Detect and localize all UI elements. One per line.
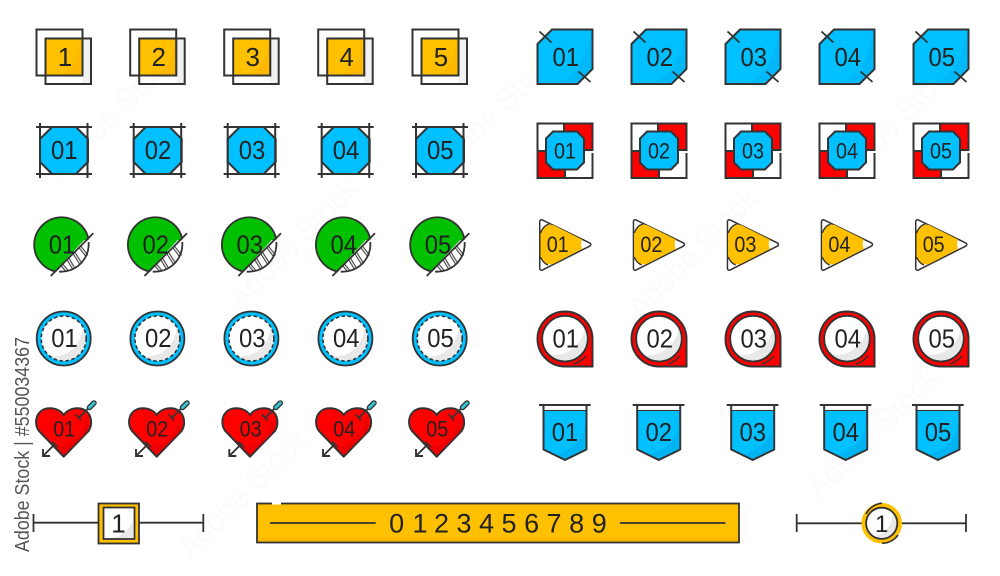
- icon: cut square 03: 03: [740, 42, 767, 72]
- numbers bar: digits 0-9: [257, 504, 739, 542]
- icon: ring 02: 02: [145, 323, 171, 353]
- icon: pin 05: [914, 312, 968, 366]
- numbers bar: digits 0-9: 3: [456, 508, 472, 538]
- icon: square 2: [130, 30, 185, 84]
- numbers bar: digits 0-9: 9: [592, 508, 607, 538]
- numbers bar: digits 0-9: 8: [569, 508, 584, 538]
- icon: octagon 04: 04: [333, 135, 359, 165]
- icon: cut square 05: 05: [928, 42, 955, 72]
- icon: pin 04: [820, 312, 874, 366]
- icon: pin 03: [726, 312, 780, 366]
- icon: quadrant 05: [914, 124, 968, 178]
- icon: cut square 02: 02: [646, 42, 673, 72]
- slider: round handle: 1: [875, 511, 888, 538]
- icon: octagon 04: [318, 123, 374, 178]
- icon: quadrant 01: [538, 124, 592, 178]
- icon: octagon 03: [224, 123, 280, 178]
- icon: cut square 03: [726, 30, 780, 84]
- icon: ring 05: [413, 312, 467, 366]
- icon: green circle 03: 03: [236, 230, 263, 260]
- icon: square 2: 2: [151, 42, 166, 72]
- icon: triangle 04: 04: [828, 232, 850, 257]
- icon: octagon 05: 05: [427, 135, 454, 165]
- icon: heart 04: 04: [333, 417, 355, 442]
- icon: banner 01: 01: [552, 417, 578, 447]
- icon: square 4: [318, 30, 373, 84]
- icon: ring 01: 01: [51, 323, 78, 353]
- icon: ring 03: 03: [239, 323, 265, 353]
- row: blue banners: [539, 405, 964, 460]
- icon: square 3: 3: [245, 42, 260, 72]
- icon: heart 04: [316, 402, 374, 457]
- row: blue ring dashed circles: [37, 312, 467, 366]
- numbers bar: digits 0-9: 6: [524, 508, 539, 538]
- icon: triangle 01: [540, 222, 589, 268]
- icon: pin 05: 05: [928, 324, 955, 354]
- icon: quadrant 04: [820, 124, 874, 178]
- icon: green circle 04: 04: [330, 230, 357, 260]
- icon: banner 05: [912, 405, 964, 460]
- slider: square handle: 1: [111, 508, 126, 538]
- icon: cut square 01: [538, 30, 592, 84]
- row: blue cut-corner squares: [538, 30, 968, 84]
- icon: triangle 02: [634, 222, 683, 268]
- icon: green circle 04: [316, 217, 375, 276]
- icon: octagon 01: [36, 123, 92, 178]
- icon: pin 01: 01: [552, 324, 579, 354]
- icon: banner 02: [633, 405, 684, 460]
- icon: square 1: [36, 30, 91, 84]
- icon: ring 03: [224, 312, 278, 366]
- icon: octagon 02: 02: [145, 135, 171, 165]
- icon: heart 03: 03: [240, 417, 262, 442]
- row: green cut circles: [34, 217, 469, 276]
- icon: quadrant 01: 01: [554, 138, 576, 163]
- icon: triangle 05: [916, 222, 965, 268]
- row: overlapping yellow squares 1-5: [36, 30, 467, 84]
- numbers bar: digits 0-9: 1: [412, 508, 428, 538]
- icon: cut square 05: [914, 30, 968, 84]
- icon: triangle 01: 01: [547, 232, 569, 257]
- icon: quadrant 02: 02: [648, 138, 670, 163]
- icon: square 5: [412, 30, 467, 84]
- icon: banner 04: [820, 405, 871, 460]
- icon: pin 02: [632, 312, 686, 366]
- icon: green circle 02: 02: [142, 230, 169, 260]
- icon: quadrant 04: 04: [836, 138, 858, 163]
- icon: green circle 01: [34, 217, 93, 276]
- icon: pin 03: 03: [740, 324, 767, 354]
- icon: ring 02: [130, 312, 184, 366]
- icon: pin 04: 04: [834, 324, 861, 354]
- numbers bar: digits 0-9: 7: [546, 508, 562, 538]
- icon: triangle 03: [728, 222, 777, 268]
- icon: heart 05: 05: [426, 417, 448, 442]
- icon: green circle 01: 01: [49, 230, 75, 260]
- icon: heart 01: [36, 402, 94, 457]
- row: red hearts with arrows: [36, 402, 467, 457]
- icon: triangle 02: 02: [640, 232, 662, 257]
- icon: cut square 04: [820, 30, 874, 84]
- icon: square 5: 5: [434, 42, 448, 72]
- credit: Adobe Stock vertical text: Adobe Stock | #550034367: [12, 337, 34, 552]
- slider: square handle: [34, 504, 203, 544]
- icon: triangle 05: 05: [923, 232, 945, 257]
- icon: heart 02: [129, 402, 187, 457]
- icon: ring 04: [318, 312, 372, 366]
- row: red pin circles: [538, 312, 968, 366]
- slider: round handle: [797, 503, 966, 543]
- icon: banner 03: 03: [739, 417, 766, 447]
- icon: green circle 05: [410, 217, 469, 276]
- icon: cut square 01: 01: [552, 42, 579, 72]
- row: blue octagons with guide lines: [36, 123, 468, 178]
- icon: square 1: 1: [58, 42, 72, 72]
- row: yellow triangles: [540, 222, 965, 268]
- icon: banner 04: 04: [832, 417, 859, 447]
- icon: quadrant 03: 03: [742, 138, 764, 163]
- icon: square 4: 4: [339, 42, 354, 72]
- icon: octagon 02: [130, 123, 186, 178]
- row: red quadrants with blue octagon: [538, 124, 968, 178]
- icon: banner 03: [727, 405, 778, 460]
- icon: pin 01: [538, 312, 592, 366]
- icon: ring 01: [37, 312, 91, 366]
- icon: banner 02: 02: [645, 417, 672, 447]
- icon: quadrant 05: 05: [930, 138, 952, 163]
- icon: heart 01: 01: [53, 417, 75, 442]
- icon: heart 05: [409, 402, 467, 457]
- icon: quadrant 02: [632, 124, 686, 178]
- icon: green circle 02: [128, 217, 187, 276]
- icon: banner 05: 05: [925, 417, 951, 447]
- icon: pin 02: 02: [646, 324, 673, 354]
- icon: cut square 02: [632, 30, 686, 84]
- icon: heart 03: [222, 402, 280, 457]
- icon: banner 01: [539, 405, 591, 460]
- icon: quadrant 03: [726, 124, 780, 178]
- icon: octagon 05: [412, 123, 468, 178]
- numbers bar: digits 0-9: 2: [434, 508, 449, 538]
- icon: heart 02: 02: [146, 417, 168, 442]
- icon: ring 05: 05: [427, 323, 454, 353]
- icon: cut square 04: 04: [834, 42, 861, 72]
- icon: triangle 03: 03: [734, 232, 756, 257]
- numbers bar: digits 0-9: 4: [479, 508, 494, 538]
- icon: octagon 03: 03: [239, 135, 265, 165]
- icon: ring 04: 04: [333, 323, 359, 353]
- icon: octagon 01: 01: [51, 135, 78, 165]
- numbers bar: digits 0-9: 0: [389, 508, 404, 538]
- icon: square 3: [224, 30, 279, 84]
- icon: triangle 04: [822, 222, 871, 268]
- icon: green circle 05: 05: [425, 230, 451, 260]
- icon: green circle 03: [222, 217, 281, 276]
- numbers bar: digits 0-9: 5: [501, 508, 517, 538]
